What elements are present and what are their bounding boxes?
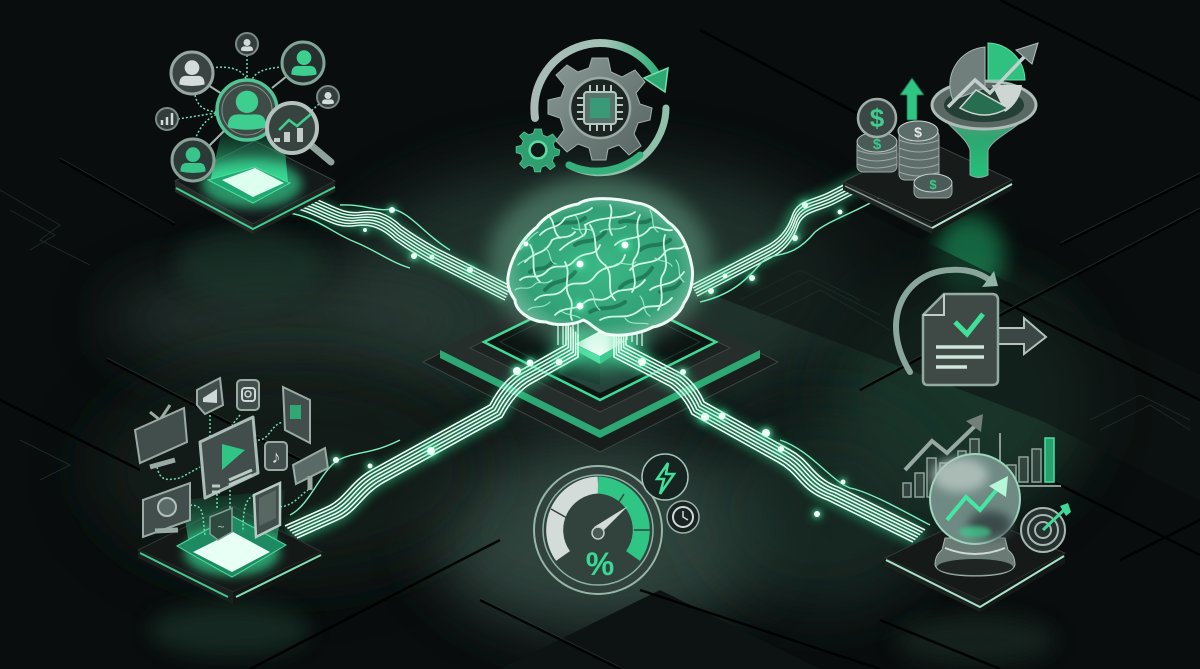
brain: [488, 176, 712, 348]
data wires: top-left to brain: [285, 192, 512, 300]
microchip: [577, 85, 623, 131]
glow beam: [210, 130, 288, 182]
clock bubble: [667, 501, 699, 533]
trend arrow: [905, 426, 975, 470]
target: [1021, 503, 1071, 552]
avatar: bottom left: [172, 139, 214, 181]
connectors: [178, 55, 319, 140]
music tile: [265, 442, 287, 470]
central chip platform: [423, 270, 778, 452]
needle: [594, 506, 628, 533]
avatar: top: [236, 33, 258, 55]
TV: [135, 405, 187, 467]
coin stacks: [857, 99, 952, 198]
bird tile: ~: [217, 520, 225, 534]
check mark: [955, 314, 983, 334]
mini chart bubble: [156, 108, 178, 130]
phone: [254, 483, 280, 537]
bar chart: [903, 439, 1041, 497]
coin stacks: $: [873, 136, 882, 153]
coin stacks: $: [914, 124, 922, 140]
bottom-left platform: media channels: [135, 378, 328, 604]
faint circuit traces: [0, 190, 1190, 480]
brain nodes: [524, 242, 628, 310]
platform base: [423, 272, 778, 452]
platform: [843, 140, 1012, 222]
avatar: top right: [282, 42, 324, 84]
top gear loop icon: [516, 43, 668, 173]
data wires: bottom-right to chip: [614, 322, 930, 542]
large gear: [548, 58, 652, 160]
top-right platform: revenue funnel: [843, 43, 1038, 234]
top-left platform: audience: [156, 33, 339, 234]
circular arrow top: [534, 43, 655, 118]
dark fold shading: [530, 218, 680, 312]
avatar: right: [317, 86, 339, 108]
music tile: ♪: [272, 447, 280, 467]
chip: [558, 343, 643, 393]
glow beam: [182, 490, 285, 552]
upward arrow: [900, 78, 924, 120]
brain folds: [520, 205, 685, 320]
platform: [175, 141, 335, 224]
small green gear: [516, 129, 560, 172]
instagram tile: [237, 380, 259, 410]
funnel: [932, 81, 1036, 178]
wire nodes: [363, 207, 473, 273]
document: [923, 294, 998, 385]
main video panel: [200, 417, 258, 498]
curved arrow: [896, 270, 992, 372]
wire nodes: [708, 202, 842, 294]
crystal ball: [930, 454, 1020, 576]
percent sign: %: [586, 546, 614, 582]
gauge arc: grey: [555, 485, 598, 556]
right arrow: [996, 318, 1046, 354]
coin stacks: $: [929, 177, 937, 192]
avatar: top left: [171, 52, 213, 94]
megaphone tile: [197, 378, 223, 414]
wire nodes: [638, 358, 846, 517]
monitor: [143, 483, 190, 537]
data wires: top-right to brain: [692, 175, 885, 302]
platform: [885, 515, 1065, 600]
wire nodes: [333, 358, 562, 468]
pie chart: [950, 43, 1025, 115]
growth arrow: [948, 43, 1038, 107]
lightning bubble: [642, 454, 688, 500]
platform: [138, 505, 322, 592]
magnifier with chart: [267, 103, 331, 162]
avatar: main: [217, 80, 277, 140]
tablet: [283, 387, 310, 443]
connectors: [157, 415, 308, 535]
bottom-right platform: forecasting: [885, 414, 1071, 612]
billboard: [293, 448, 328, 490]
document lines: [936, 347, 984, 367]
dial: [534, 466, 662, 594]
right document icon: [896, 270, 1046, 385]
gauge arc: green: [598, 485, 641, 556]
bottom gauge: [534, 454, 699, 594]
circular arrow bottom: [569, 108, 666, 173]
vertical traces under the brain: [558, 318, 642, 346]
data wires: bottom-left to chip: [285, 322, 578, 538]
coin stacks: $: [870, 103, 885, 133]
bird tile: [210, 508, 232, 540]
